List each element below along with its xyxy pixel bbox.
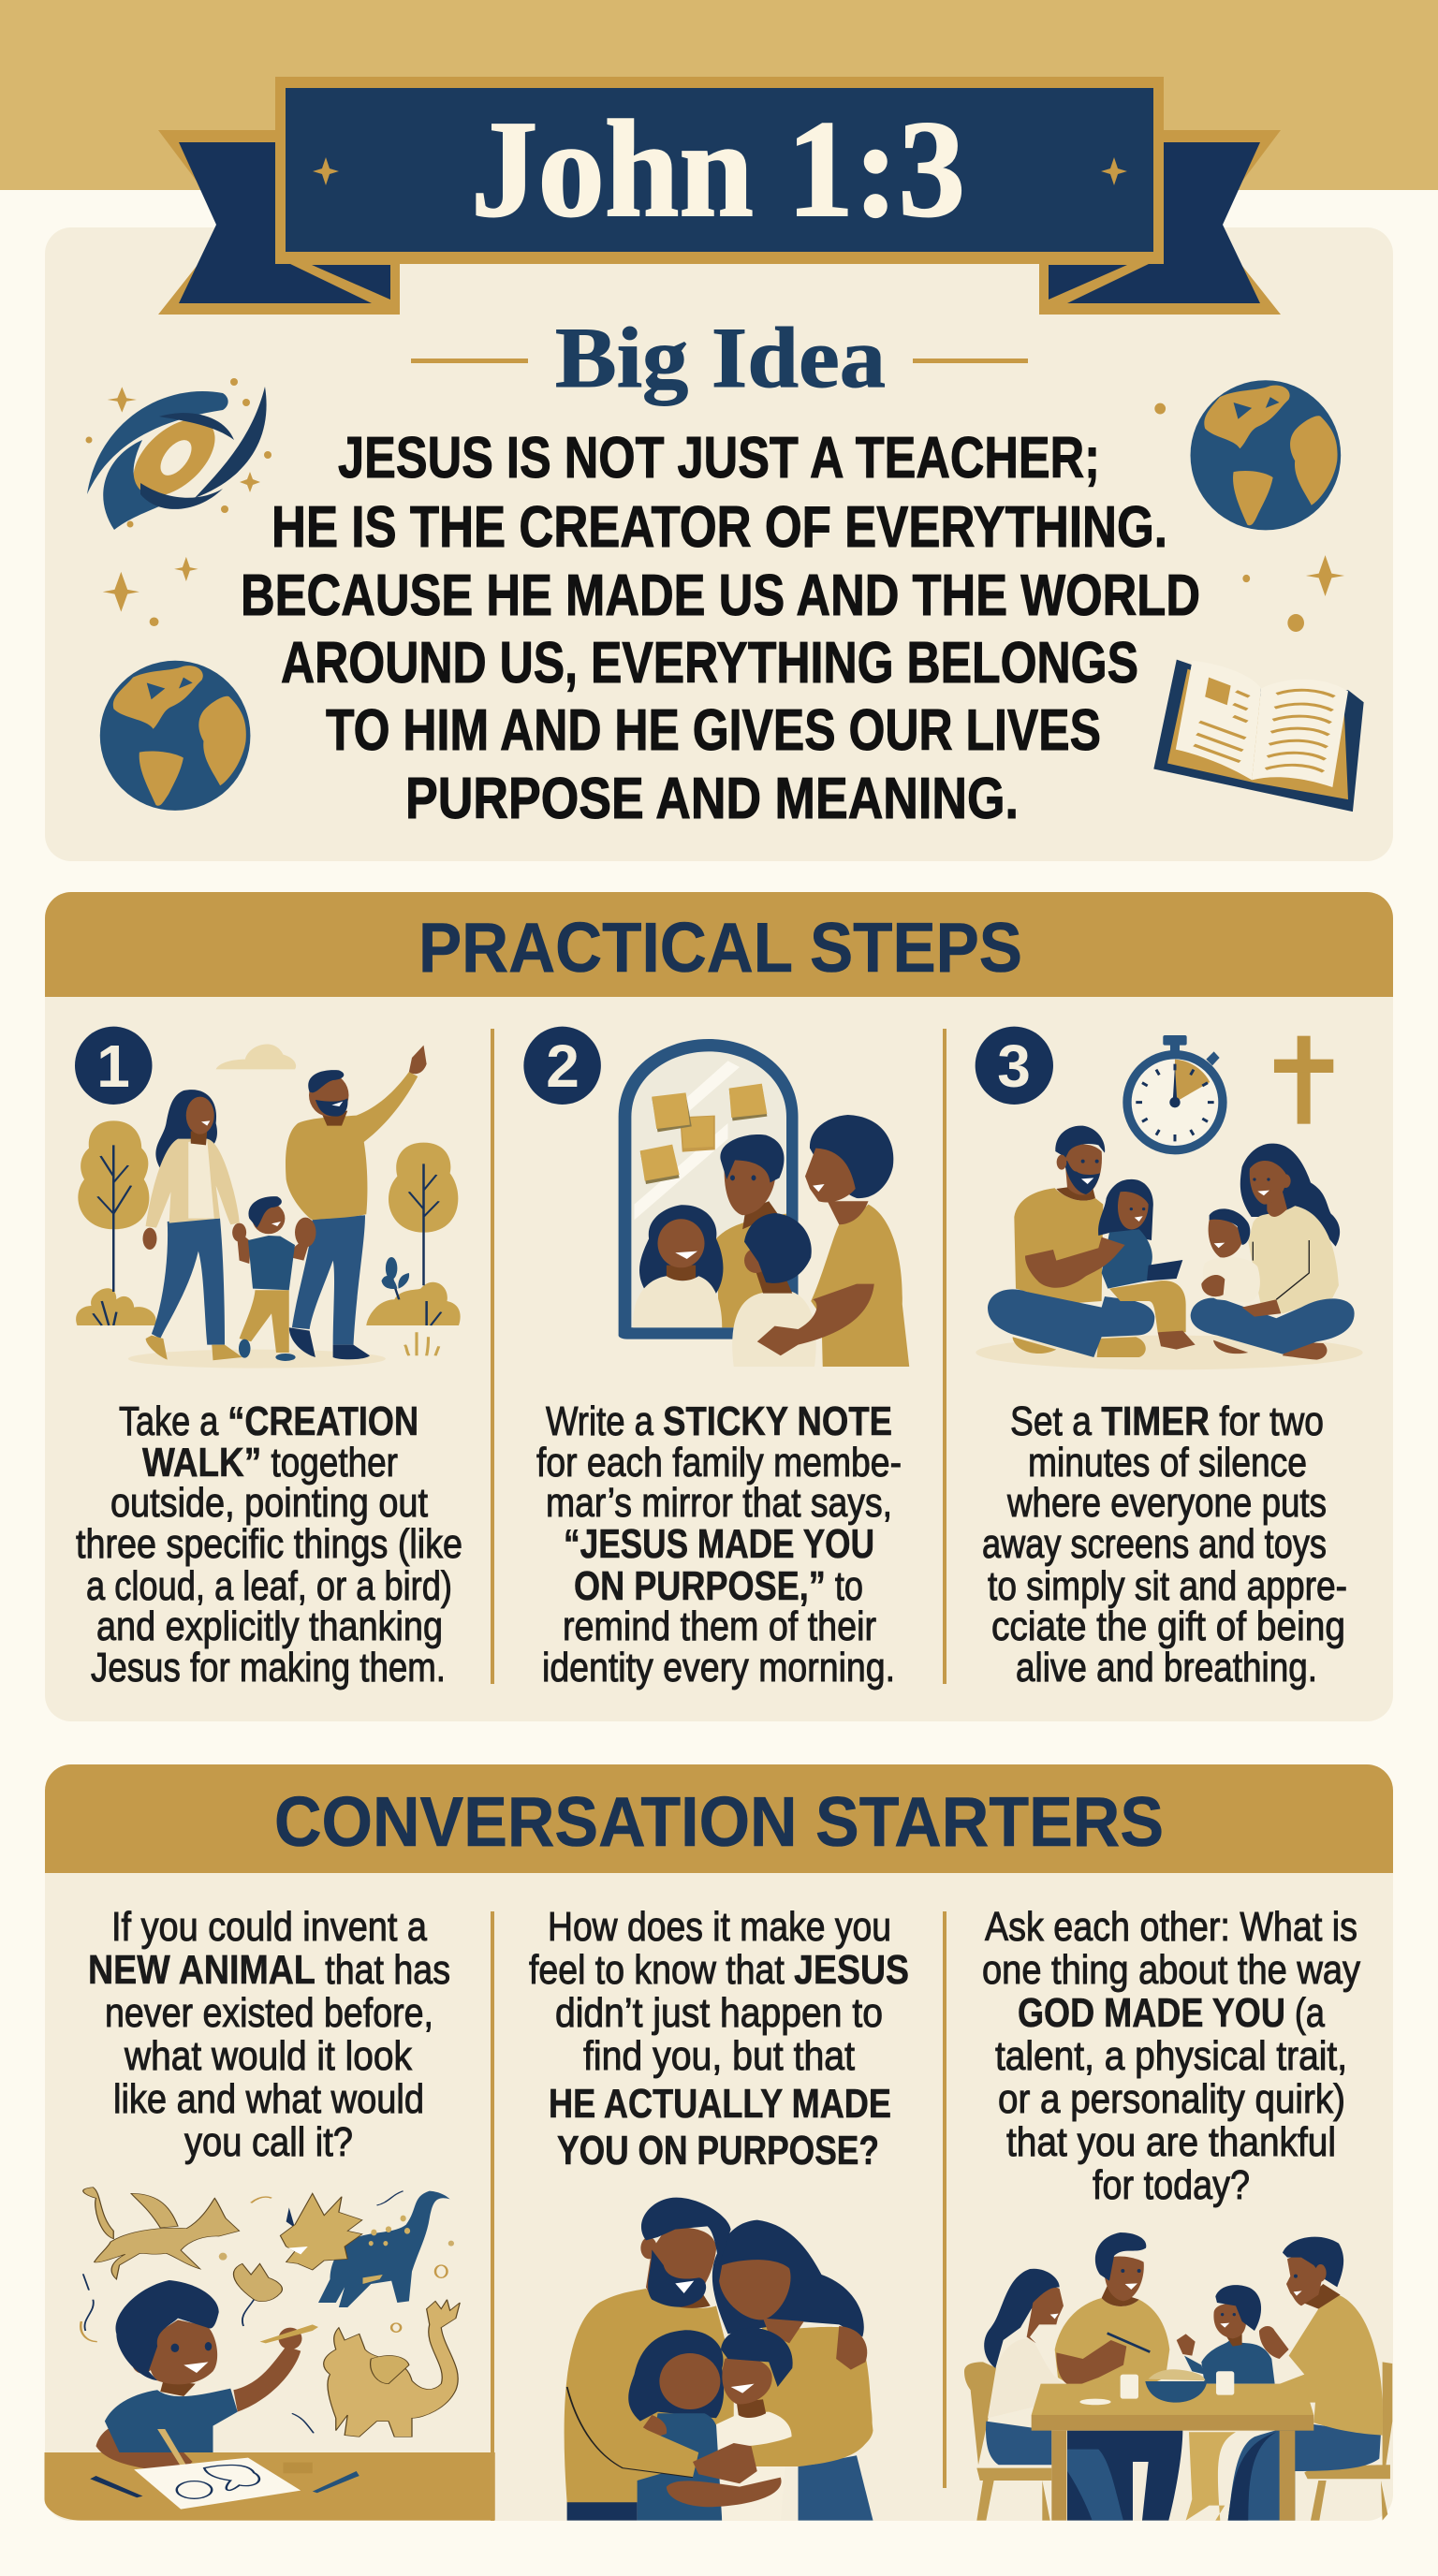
header: conversation starters bbox=[45, 1764, 1393, 1873]
text: starter 3: one thing about the way bbox=[982, 1947, 1360, 1993]
text: step 3: minutes of silence bbox=[1028, 1440, 1307, 1486]
illustration: boy drawing animals bbox=[45, 2188, 495, 2521]
text: starter 1: what would it look bbox=[124, 2033, 413, 2079]
text: step 1: three specific things (like bbox=[76, 1521, 462, 1567]
text: step 3: where everyone puts bbox=[1006, 1480, 1327, 1526]
icon: sparkles bbox=[103, 387, 1344, 632]
girl bbox=[628, 2330, 724, 2521]
text: starter 3: that you are thankful bbox=[1006, 2119, 1336, 2165]
icon: open book bbox=[1153, 660, 1364, 812]
text: step 2 bbox=[536, 1398, 902, 1690]
text: step 1 bbox=[76, 1398, 462, 1690]
text: starter 1: like and what would bbox=[113, 2076, 424, 2122]
header: conversation starters: CONVERSATION STARTERS bbox=[274, 1782, 1164, 1861]
child bbox=[1177, 2285, 1275, 2521]
text: starter 3: for today? bbox=[1093, 2162, 1250, 2208]
centre man bbox=[1055, 2232, 1182, 2521]
text: step 3 bbox=[982, 1398, 1347, 1690]
icon: globe top right bbox=[1191, 380, 1341, 530]
boy bbox=[95, 2280, 318, 2479]
leaf and scribbles bbox=[81, 2191, 454, 2433]
header: practical steps bbox=[45, 892, 1393, 997]
table and dishes bbox=[1032, 2369, 1313, 2521]
woman seated bbox=[984, 2269, 1105, 2465]
step 3 badge bbox=[976, 1027, 1053, 1105]
text: starter 1 bbox=[88, 1904, 450, 2165]
step 1 illustration: family walk bbox=[75, 1027, 461, 1368]
text: step 1: and explicitly thanking bbox=[96, 1603, 443, 1649]
icons: space decorations bbox=[100, 380, 1364, 812]
father body bbox=[565, 2289, 734, 2521]
text: starter 2: HE ACTUALLY MADE bbox=[549, 2081, 891, 2127]
step 2 badge bbox=[523, 1027, 601, 1105]
text: starter 2: YOU ON PURPOSE? bbox=[557, 2128, 879, 2174]
text: step 1: Take a “CREATION bbox=[119, 1398, 418, 1444]
illustration: family table bbox=[964, 2232, 1392, 2521]
drawn table bbox=[45, 2452, 495, 2521]
text: starter 1: you call it? bbox=[184, 2119, 353, 2165]
text: step 3: alive and breathing. bbox=[1016, 1645, 1317, 1690]
mother and son bbox=[1191, 1144, 1355, 1360]
dragon gold winged bbox=[83, 2188, 240, 2279]
text: big idea statement: JESUS IS NOT JUST A TEACHER; bbox=[338, 426, 1100, 490]
embracing arms bbox=[567, 2387, 873, 2507]
icon: cross bbox=[1274, 1036, 1333, 1124]
step 2 illustration: mirror bbox=[523, 1027, 909, 1367]
chairs bbox=[964, 2362, 1392, 2521]
badge numbers: 3 bbox=[997, 1032, 1031, 1100]
heading: Big Idea bbox=[411, 310, 1028, 405]
boy from behind bbox=[732, 1213, 816, 1367]
text: starter 2 bbox=[529, 1904, 909, 2174]
text: starter 1: If you could invent a bbox=[111, 1904, 427, 1950]
reflection: father bbox=[716, 1134, 786, 1327]
icon: stopwatch bbox=[1127, 1035, 1223, 1150]
text: step 2: Write a STICKY NOTE bbox=[546, 1398, 892, 1444]
text: big idea statement: HE IS THE CREATOR OF EVERYTHING. bbox=[271, 495, 1167, 560]
heading: Big Idea: Big Idea bbox=[555, 310, 886, 405]
text: big idea statement: PURPOSE AND MEANING. bbox=[405, 767, 1019, 831]
icon: globe bottom left bbox=[100, 661, 250, 811]
text: starter 1: never existed before, bbox=[105, 1990, 433, 2036]
right man bbox=[1228, 2237, 1383, 2521]
text: step 3: Set a TIMER for two bbox=[1010, 1398, 1324, 1444]
badge numbers: 1 bbox=[96, 1032, 130, 1100]
father head bbox=[640, 2198, 731, 2308]
ribbon tail left bbox=[158, 130, 400, 315]
text: step 2: for each family membe- bbox=[536, 1440, 902, 1486]
illustration: family hug bbox=[565, 2198, 873, 2521]
step 3 illustration: sitting family bbox=[976, 1027, 1363, 1369]
text: starter 2: find you, but that bbox=[583, 2033, 855, 2079]
text: step 2: mar’s mirror that says, bbox=[546, 1480, 892, 1526]
mirror and notes bbox=[619, 1039, 798, 1339]
text: step 3: to simply sit and appre- bbox=[988, 1563, 1347, 1609]
panel: conversation starters bbox=[45, 1764, 1393, 2521]
mother body bbox=[740, 2324, 873, 2521]
panel: big idea bbox=[45, 227, 1393, 861]
dragon blue with mane bbox=[280, 2191, 450, 2307]
ribbon tail right bbox=[1039, 130, 1281, 315]
text: big idea statement bbox=[241, 426, 1200, 831]
text: step 1: outside, pointing out bbox=[110, 1480, 428, 1526]
text: step 2: remind them of their bbox=[563, 1603, 876, 1649]
text: starter 2: didn’t just happen to bbox=[555, 1990, 883, 2036]
title banner bbox=[158, 77, 1281, 315]
reflection: girl bbox=[633, 1205, 723, 1327]
man pointing bbox=[286, 1046, 427, 1359]
title text: John 1:3 bbox=[471, 93, 965, 246]
woman bbox=[142, 1090, 246, 1360]
boy bbox=[716, 2328, 793, 2521]
child bbox=[236, 1196, 313, 1361]
mother head bbox=[712, 2220, 867, 2370]
text: big idea statement: TO HIM AND HE GIVES OUR LIVES bbox=[326, 698, 1101, 763]
top gold band bbox=[0, 0, 1438, 190]
dragon gold sitting bbox=[324, 2300, 460, 2437]
text: step 1: WALK” together bbox=[142, 1440, 398, 1486]
text: step 2: “JESUS MADE YOU bbox=[564, 1521, 874, 1567]
text: starter 3: Ask each other: What is bbox=[985, 1904, 1357, 1950]
header: practical steps: PRACTICAL STEPS bbox=[418, 908, 1022, 987]
text: starter 3: talent, a physical trait, bbox=[995, 2033, 1347, 2079]
text: step 1: a cloud, a leaf, or a bird) bbox=[86, 1563, 452, 1609]
text: step 3: away screens and toys bbox=[982, 1521, 1327, 1567]
step 1 badge bbox=[75, 1027, 152, 1105]
text: starter 2: How does it make you bbox=[548, 1904, 891, 1950]
mother bbox=[757, 1115, 909, 1367]
panel: practical steps bbox=[45, 892, 1393, 1721]
text: big idea statement: BECAUSE HE MADE US AND THE WORLD bbox=[241, 564, 1200, 628]
text: starter 3: or a personality quirk) bbox=[998, 2076, 1345, 2122]
text: big idea statement: AROUND US, EVERYTHING BELONGS bbox=[281, 631, 1138, 695]
banner plate bbox=[275, 77, 1164, 264]
badge numbers: 2 bbox=[546, 1032, 580, 1100]
text: starter 3: GOD MADE YOU (a bbox=[1018, 1990, 1325, 2036]
text: starter 3 bbox=[982, 1904, 1360, 2208]
badge numbers bbox=[96, 1032, 1031, 1100]
text: step 3: cciate the gift of being bbox=[991, 1603, 1345, 1649]
text: step 1: Jesus for making them. bbox=[91, 1645, 446, 1690]
father and daughter bbox=[988, 1126, 1196, 1357]
paper and crayons bbox=[90, 2458, 360, 2510]
icon: galaxy bbox=[86, 378, 271, 530]
text: step 2: identity every morning. bbox=[542, 1645, 895, 1690]
text: starter 2: feel to know that JESUS bbox=[529, 1947, 909, 1993]
text: starter 1: NEW ANIMAL that has bbox=[88, 1947, 450, 1993]
text: step 2: ON PURPOSE,” to bbox=[574, 1563, 863, 1609]
